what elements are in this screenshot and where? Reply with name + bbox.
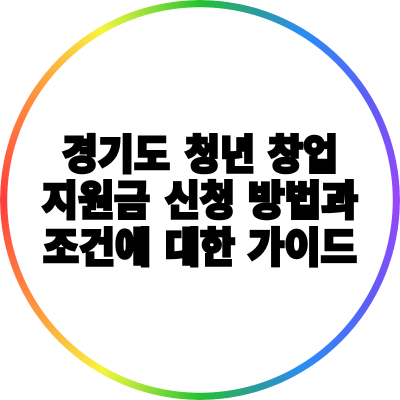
title line 3 <box>43 225 357 271</box>
title line 1 <box>62 132 338 178</box>
title line 3: 가이드 <box>248 225 357 271</box>
title line 2 <box>42 178 358 224</box>
title line 3: 대한 <box>165 225 235 271</box>
title line 1: 경기도 <box>62 132 170 178</box>
title line 3: 조건에 <box>43 225 151 271</box>
title line 1: 청년 <box>185 132 255 178</box>
title line 1: 창업 <box>268 132 338 178</box>
title line 2: 지원금 <box>42 178 150 224</box>
title line 2: 신청 <box>165 178 235 224</box>
title line 2: 방법과 <box>248 178 358 224</box>
